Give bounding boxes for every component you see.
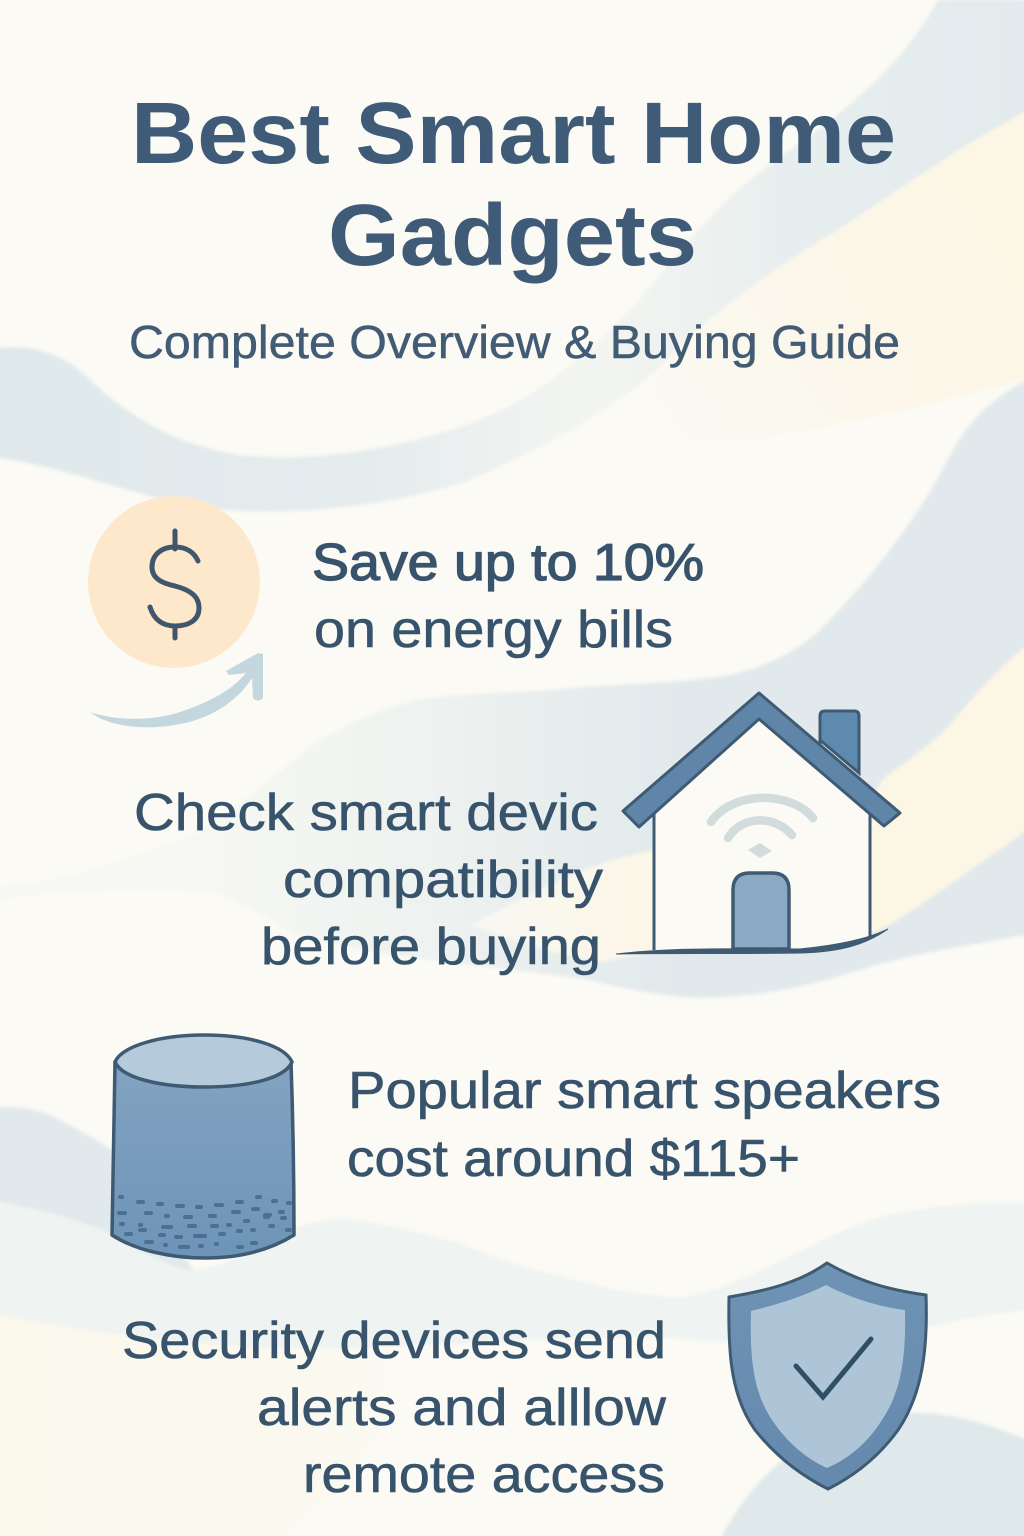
text: security: alerts and alllow <box>257 1379 666 1437</box>
wifi signal <box>711 798 813 838</box>
title: Best Smart Home <box>131 85 896 182</box>
subtitle: Complete Overview & Buying Guide <box>129 316 900 368</box>
ground line <box>616 929 888 954</box>
icon: smart speaker <box>112 1035 294 1258</box>
text: energy savings: on energy bills <box>314 601 673 659</box>
speaker grille <box>119 1197 290 1247</box>
text: security <box>122 1312 666 1504</box>
text: compatibility: compatibility <box>283 851 603 909</box>
text: speakers price <box>347 1062 941 1188</box>
door <box>733 873 789 949</box>
icon: growth arrow <box>90 653 263 727</box>
chimney <box>820 711 859 773</box>
title <box>131 85 896 284</box>
text: energy savings: Save up to 10% <box>312 534 704 592</box>
text: speakers price: cost around $115+ <box>347 1130 800 1188</box>
title: Gadgets <box>328 187 697 284</box>
icon: smart house <box>616 693 900 954</box>
text: speakers price: Popular smart speakers <box>348 1062 941 1120</box>
text: security: Security devices send <box>122 1312 666 1370</box>
text: compatibility: Check smart devic <box>134 784 598 842</box>
roof <box>623 693 900 827</box>
text: compatibility <box>134 784 603 976</box>
text: security: remote access <box>303 1446 665 1504</box>
icon: security shield <box>729 1263 926 1489</box>
text: energy savings <box>312 534 704 659</box>
text: compatibility: before buying <box>261 918 601 976</box>
icon: dollar coin <box>88 496 260 668</box>
